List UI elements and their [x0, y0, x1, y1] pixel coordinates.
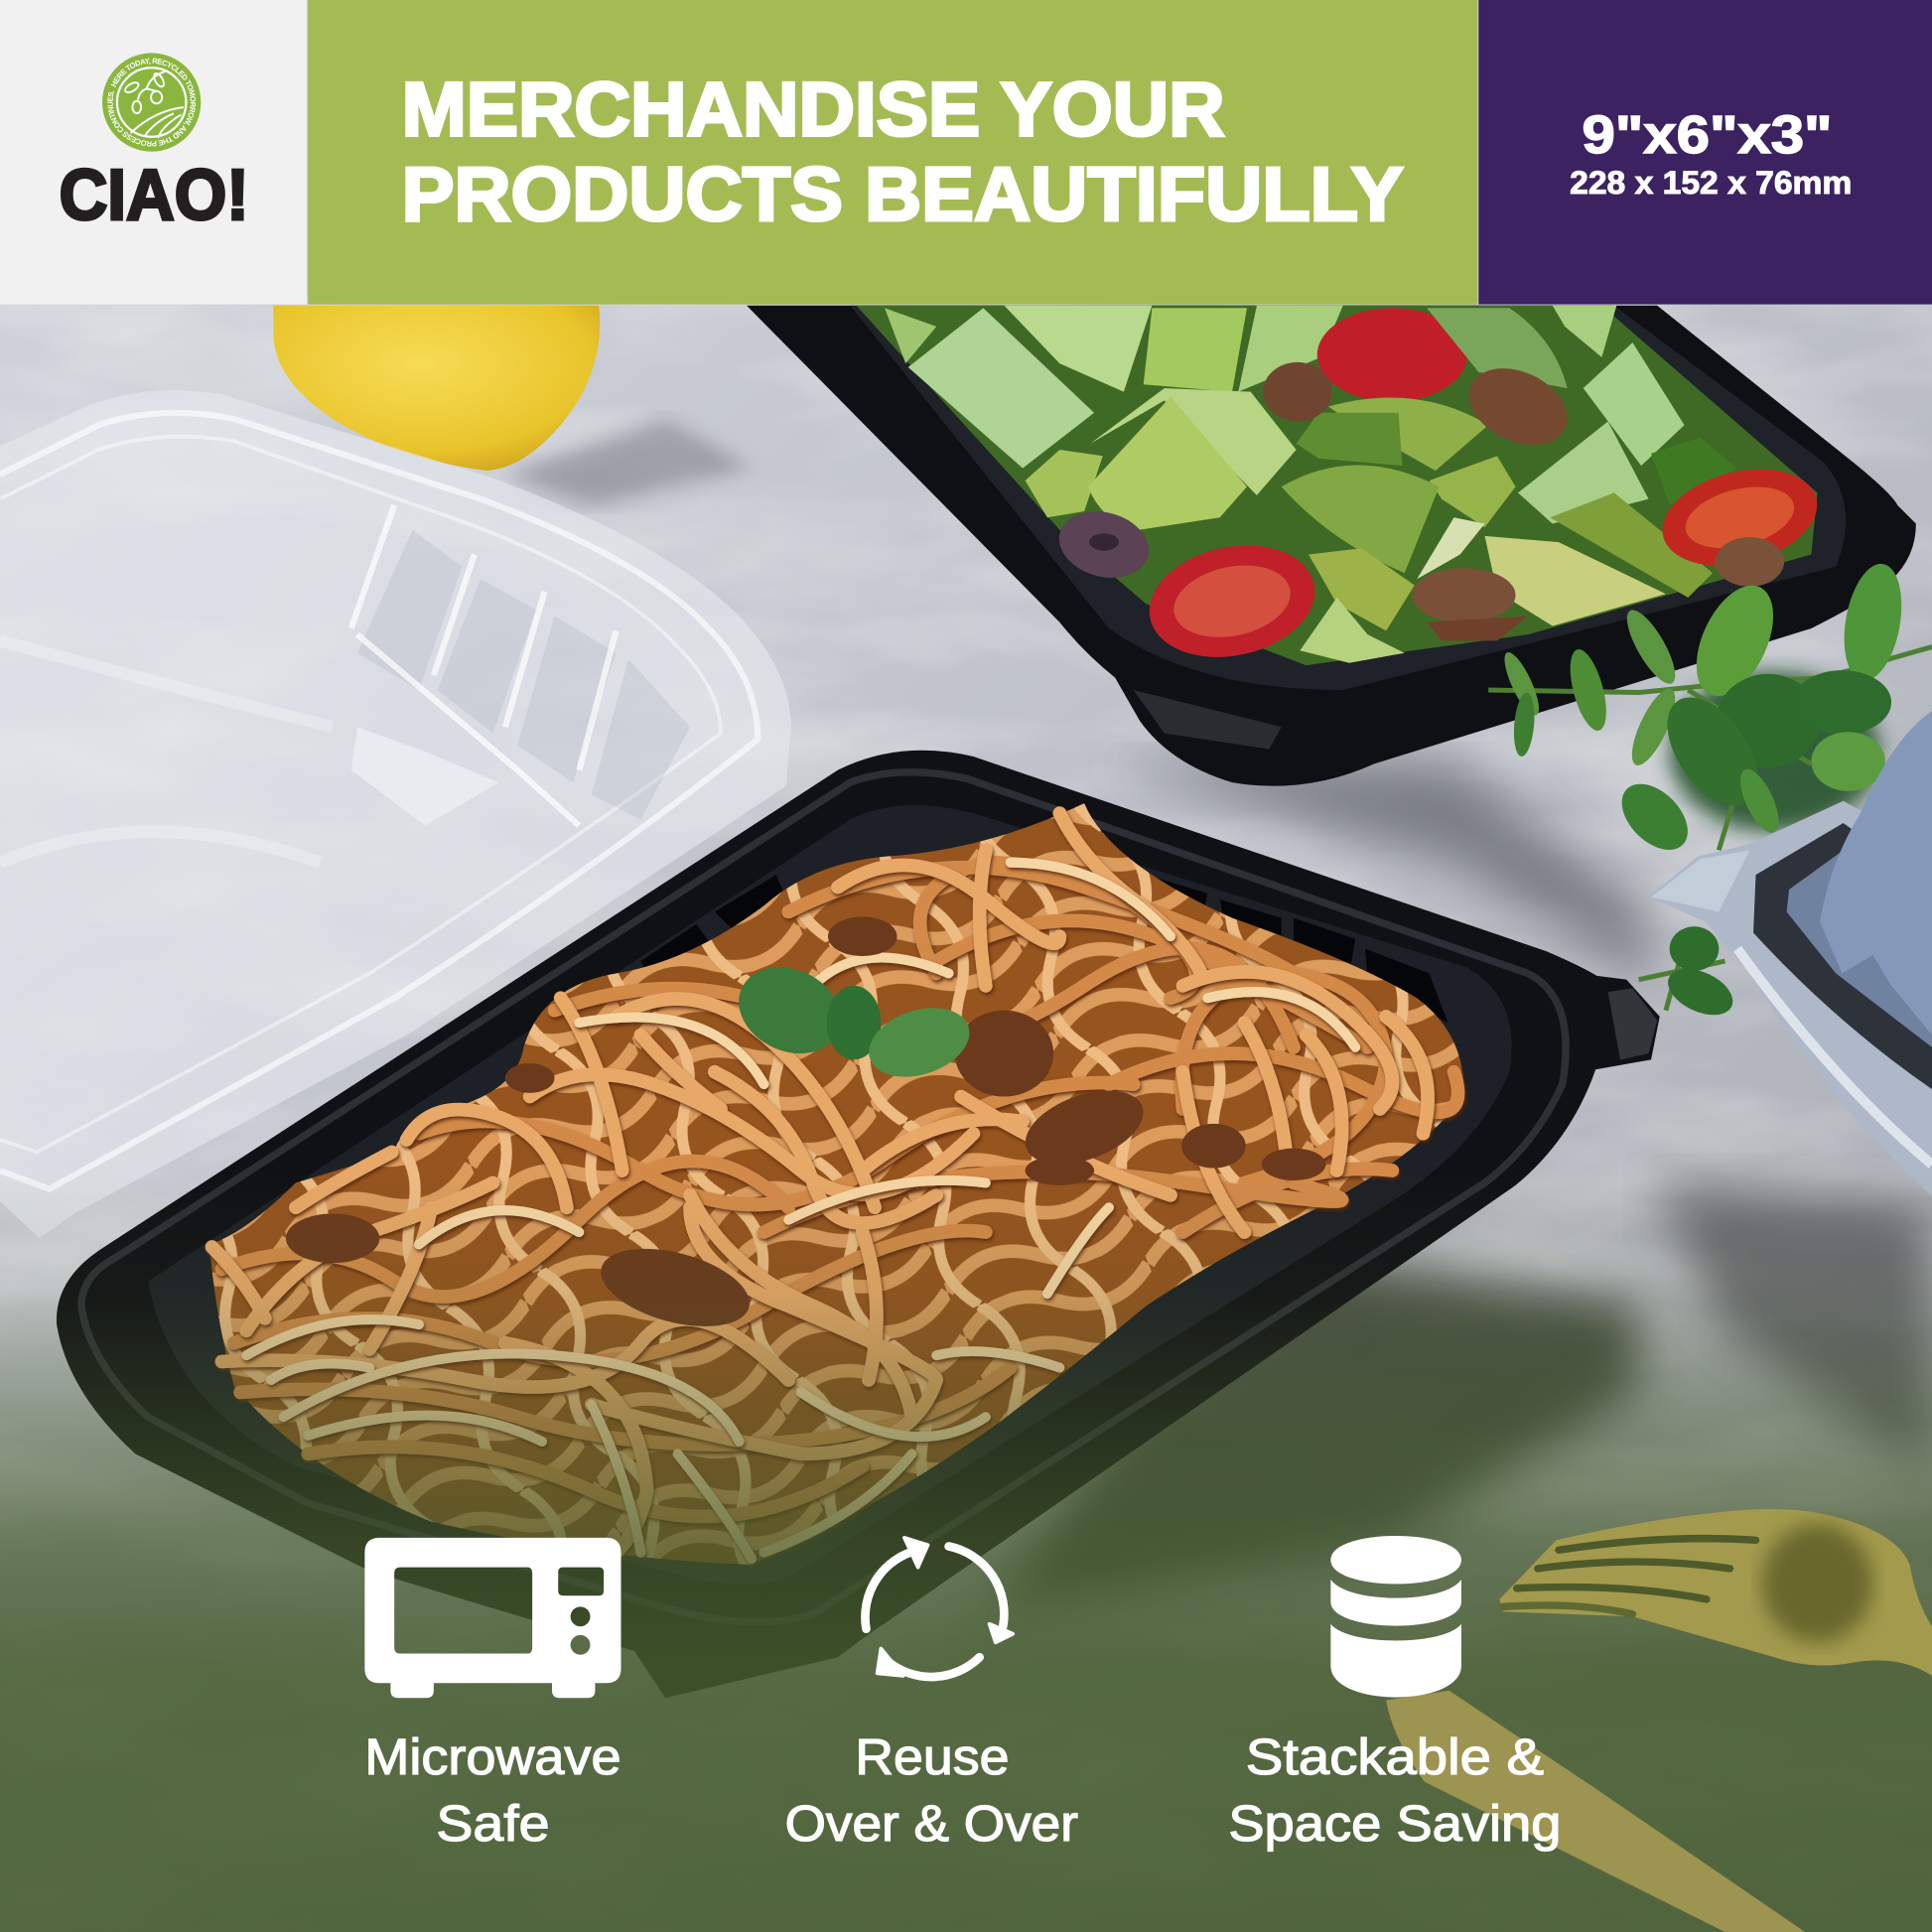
- label: Space Saving: [1228, 1795, 1561, 1852]
- back tray with salad: [747, 306, 1916, 786]
- label: Stackable &: [1246, 1728, 1544, 1785]
- logo panel: [0, 0, 307, 304]
- icon: recycle arrows: [865, 1538, 1013, 1677]
- label: [785, 1728, 1078, 1852]
- salad pieces: [857, 306, 1828, 672]
- bottom green gradient overlay: [0, 1171, 1932, 1932]
- tray handle: [1134, 690, 1282, 750]
- feature: stackable and space saving: [1228, 1536, 1561, 1852]
- size panel: 228 x 152 x 76mm: [1570, 165, 1852, 201]
- headline panel: MERCHANDISE YOUR: [402, 68, 1225, 153]
- green plant sprig: [1488, 559, 1932, 1025]
- tray rim highlight: [81, 772, 1566, 1622]
- label: Over & Over: [785, 1795, 1078, 1852]
- right-hand tray with clear lid: [1649, 711, 1932, 1196]
- brand wordmark: CIAO!: [60, 156, 249, 235]
- gold fork: [1499, 1509, 1932, 1676]
- main black tray with spaghetti: [57, 751, 1660, 1698]
- lemon: [274, 306, 600, 471]
- meat sauce clumps: [286, 916, 1325, 1340]
- feature: microwave safe: [364, 1538, 621, 1852]
- gold knife: [1386, 1691, 1805, 1932]
- light strands: [246, 863, 1355, 1559]
- tray inner well: [148, 805, 1512, 1585]
- header bar: [0, 0, 1932, 305]
- tray ribbed inner wall: [640, 875, 1448, 1023]
- icon: stacked containers: [1330, 1536, 1461, 1698]
- label: Safe: [436, 1795, 550, 1852]
- size panel: [1478, 0, 1932, 305]
- label: Microwave: [364, 1728, 621, 1785]
- icon: olive branch badge: HERE TODAY, RECYCLED TOMORROW, AND THE PROCESS CONTINUES.: [107, 58, 197, 147]
- label: Reuse: [855, 1728, 1009, 1785]
- headline panel: PRODUCTS BEAUTIFULLY: [402, 152, 1404, 237]
- tray handle right: [1608, 988, 1657, 1059]
- dark strands: [221, 863, 1458, 1517]
- headline panel: [308, 0, 1477, 305]
- feature: reuse over and over: [785, 1538, 1078, 1852]
- size panel: 9"x6"x3": [1583, 106, 1832, 165]
- black tray body: [747, 306, 1916, 786]
- icon: microwave: [364, 1538, 621, 1698]
- mint garnish: [725, 951, 978, 1089]
- tray outer body: [57, 751, 1660, 1698]
- spaghetti: [209, 803, 1464, 1565]
- label: [1228, 1728, 1561, 1852]
- mid strands: [211, 813, 1428, 1553]
- label: [364, 1728, 621, 1852]
- clear plastic lid: [0, 390, 791, 1238]
